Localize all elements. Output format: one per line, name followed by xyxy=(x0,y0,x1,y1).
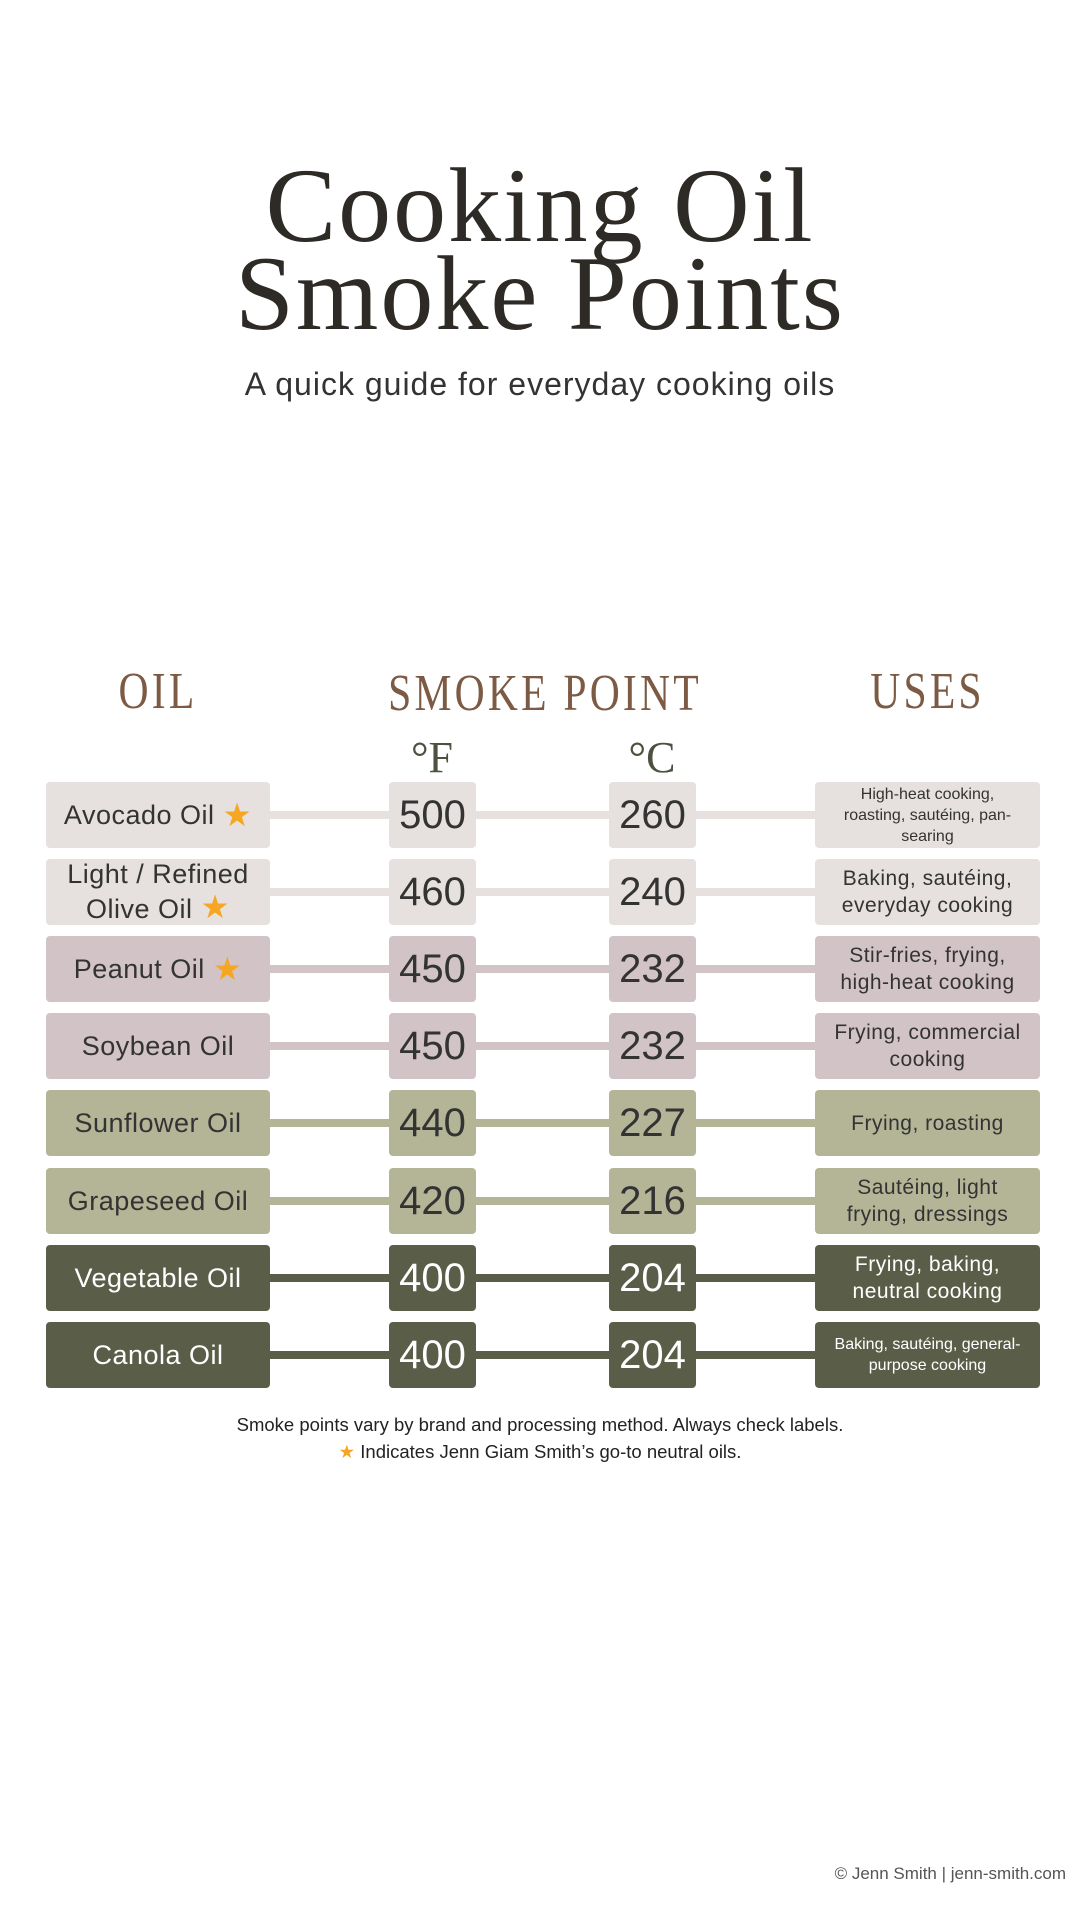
unit: celsius: °C xyxy=(629,733,675,782)
row: vegetable: Frying, baking, xyxy=(855,1253,1000,1276)
row: vegetable: Vegetable Oil xyxy=(74,1262,242,1292)
row: sunflower: 440 xyxy=(399,1100,466,1144)
row: peanut: 450 xyxy=(399,946,466,990)
row: avocado: 500 xyxy=(399,792,466,836)
row: olive: 240 xyxy=(619,870,686,914)
row: peanut: ★ xyxy=(213,950,242,986)
header: uses: USES xyxy=(870,663,985,720)
row: canola: Baking, sautéing, general- xyxy=(835,1336,1020,1353)
row: soybean: Soybean Oil xyxy=(82,1030,234,1060)
footnote: Smoke points vary by brand and processing method. Always check labels. xyxy=(237,1414,843,1435)
title xyxy=(235,147,845,352)
header: smoke point: SMOKE POINT xyxy=(388,665,702,722)
row: vegetable: 400 xyxy=(399,1256,466,1300)
row: avocado: searing xyxy=(901,828,954,844)
unit: fahrenheit: °F xyxy=(411,733,453,782)
row: avocado: roasting, sautéing, pan- xyxy=(844,806,1011,824)
row: soybean: 450 xyxy=(399,1024,466,1068)
row: sunflower xyxy=(46,1090,1040,1156)
row: olive: Light / Refined xyxy=(67,859,249,889)
row: avocado: ★ xyxy=(223,796,252,832)
footnote: ★ Indicates Jenn Giam Smith’s go-to neutral oils. xyxy=(339,1441,741,1462)
row: vegetable: neutral cooking xyxy=(853,1280,1002,1303)
row: canola: Canola Oil xyxy=(92,1340,224,1370)
copyright: © Jenn Smith | jenn-smith.com xyxy=(835,1864,1066,1883)
row: grapeseed: 216 xyxy=(619,1178,686,1222)
row: sunflower: Sunflower Oil xyxy=(74,1108,242,1138)
title: Cooking Oil xyxy=(265,147,815,264)
row: avocado: 260 xyxy=(619,792,686,836)
row: olive xyxy=(46,859,1040,925)
row: grapeseed xyxy=(46,1168,1040,1234)
row: grapeseed: 420 xyxy=(399,1178,466,1222)
row: grapeseed: Sautéing, light xyxy=(857,1176,998,1199)
title: Smoke Points xyxy=(235,235,845,352)
row: avocado xyxy=(46,782,1040,848)
row: peanut: Peanut Oil xyxy=(74,954,205,984)
footnote xyxy=(237,1414,843,1462)
row: olive: 460 xyxy=(399,870,466,914)
row: grapeseed: Grapeseed Oil xyxy=(68,1186,248,1216)
row: sunflower: 227 xyxy=(619,1100,686,1144)
row: soybean: Frying, commercial xyxy=(834,1021,1021,1044)
row: vegetable: 204 xyxy=(619,1256,686,1300)
row: canola: 204 xyxy=(619,1332,686,1376)
row: soybean xyxy=(46,1013,1040,1079)
row: avocado: Avocado Oil xyxy=(64,800,215,830)
row: olive: Baking, sautéing, xyxy=(843,867,1012,890)
header: oil: OIL xyxy=(119,663,197,720)
row: peanut: high-heat cooking xyxy=(840,971,1015,994)
row: sunflower: Frying, roasting xyxy=(851,1112,1004,1134)
row: olive: Olive Oil ★ xyxy=(86,889,230,925)
row: soybean: 232 xyxy=(619,1024,686,1068)
row: peanut: 232 xyxy=(619,946,686,990)
row: peanut: Stir-fries, frying, xyxy=(849,944,1006,967)
row: peanut xyxy=(46,936,1040,1002)
row: avocado: High-heat cooking, xyxy=(861,786,994,802)
row: canola: purpose cooking xyxy=(869,1357,986,1374)
row: canola xyxy=(46,1322,1040,1388)
row: olive: everyday cooking xyxy=(842,894,1013,917)
row: canola: 400 xyxy=(399,1332,466,1376)
row: grapeseed: frying, dressings xyxy=(847,1203,1008,1226)
row: vegetable xyxy=(46,1245,1040,1311)
row: soybean: cooking xyxy=(890,1048,965,1071)
subtitle: A quick guide for everyday cooking oils xyxy=(245,366,835,402)
